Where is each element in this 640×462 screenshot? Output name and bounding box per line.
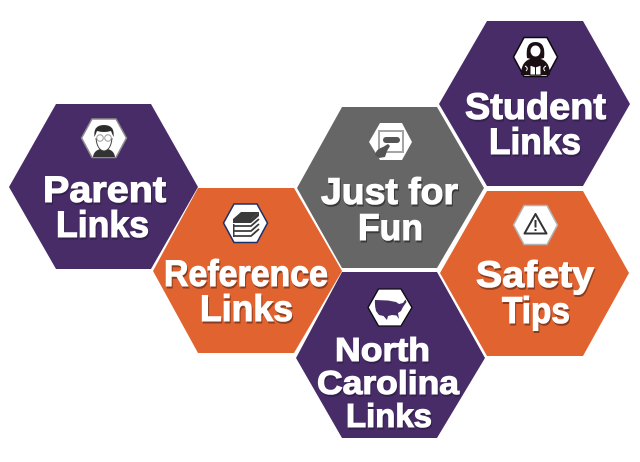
heading: North Carolina Links <box>317 331 460 434</box>
icon: parent with glasses <box>82 119 126 158</box>
panel: Just for Fun <box>297 107 484 268</box>
heading: Reference Links <box>164 253 328 329</box>
heading: Reference Links: Links <box>200 288 293 329</box>
heading: Safety Tips: Safety <box>476 254 594 295</box>
heading: Safety Tips: Tips <box>502 290 570 331</box>
icon: stack of books <box>224 204 268 242</box>
heading: North Carolina Links: Carolina <box>317 364 460 401</box>
heading: Student Links: Links <box>489 121 581 162</box>
heading: Parent Links <box>43 169 166 245</box>
icon: warning triangle <box>514 206 558 244</box>
icon: student reading <box>514 38 558 76</box>
heading: Safety Tips <box>476 254 594 331</box>
icon: map of USA <box>368 289 412 326</box>
panel: North Carolina Links <box>296 272 485 438</box>
heading: North Carolina Links: North <box>335 331 430 368</box>
heading: Reference Links: Reference <box>164 253 328 294</box>
panel: Student Links <box>439 21 630 186</box>
heading: Just for Fun: Fun <box>358 207 423 248</box>
heading: North Carolina Links: Links <box>346 397 432 434</box>
heading: Student Links <box>465 86 606 162</box>
heading: Parent Links: Links <box>56 204 149 245</box>
heading: Student Links: Student <box>465 86 606 127</box>
panel: Reference Links <box>153 188 342 353</box>
panel: Parent Links <box>9 104 198 269</box>
panel: Safety Tips <box>440 191 629 356</box>
heading: Just for Fun <box>321 171 458 248</box>
icon: play screen with hand <box>369 123 412 160</box>
heading: Parent Links: Parent <box>43 169 166 210</box>
heading: Just for Fun: Just for <box>321 171 458 212</box>
